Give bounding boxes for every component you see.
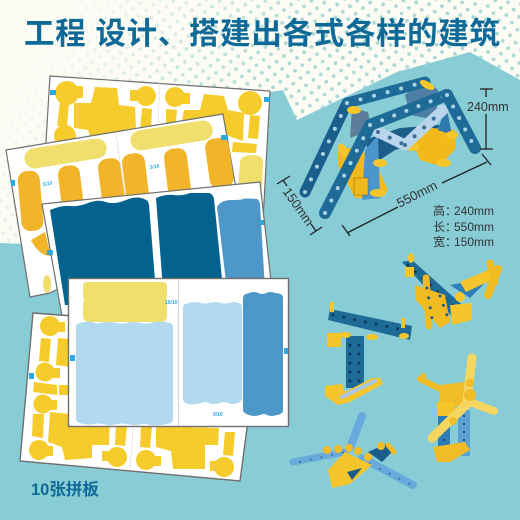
- model: airplane: [293, 416, 413, 488]
- model: windmill: [420, 358, 494, 462]
- yellow bracket left: [336, 135, 388, 200]
- dimension: length 550mm: 550mm: [394, 177, 440, 211]
- panel: bottom yellow puzzle sheet: [20, 313, 260, 481]
- dimension: height 240mm: [467, 89, 509, 149]
- panel: front light blue puzzle sheet: 9/10: [213, 412, 223, 418]
- model: crane: [402, 253, 498, 328]
- model: bridge arch: [305, 78, 475, 213]
- spec list: 550mm: [454, 220, 494, 234]
- dimension: width 150mm: [277, 176, 322, 235]
- panel: orange puzzle sheet: [6, 114, 238, 297]
- panel: front light blue puzzle sheet: 10/10: [165, 300, 178, 306]
- panel: orange puzzle sheet: 3/10: [149, 163, 160, 171]
- dimension: length 550mm: [342, 154, 491, 236]
- spec list: 高：: [433, 203, 457, 218]
- panel: dark blue puzzle sheet: [42, 182, 272, 316]
- spec list: 宽：: [433, 234, 457, 249]
- caption: 10 boards: 10张拼板: [31, 480, 99, 499]
- panel: yellow puzzle sheet back: [40, 76, 270, 240]
- spec list: 240mm: [454, 204, 494, 218]
- panel: front light blue puzzle sheet: [68, 278, 288, 426]
- dimension: width 150mm: 150mm: [280, 185, 317, 229]
- panel: orange puzzle sheet: 5/10: [42, 180, 53, 188]
- spec list: 长：: [433, 220, 457, 234]
- spec list: [433, 203, 494, 249]
- spec list: 150mm: [454, 235, 494, 249]
- model: T tower: [325, 302, 412, 405]
- dimension: height 240mm: 240mm: [467, 100, 509, 114]
- yellow bracket right: [405, 105, 458, 167]
- title: 工程 设计、搭建出各式各样的建筑: [24, 17, 500, 51]
